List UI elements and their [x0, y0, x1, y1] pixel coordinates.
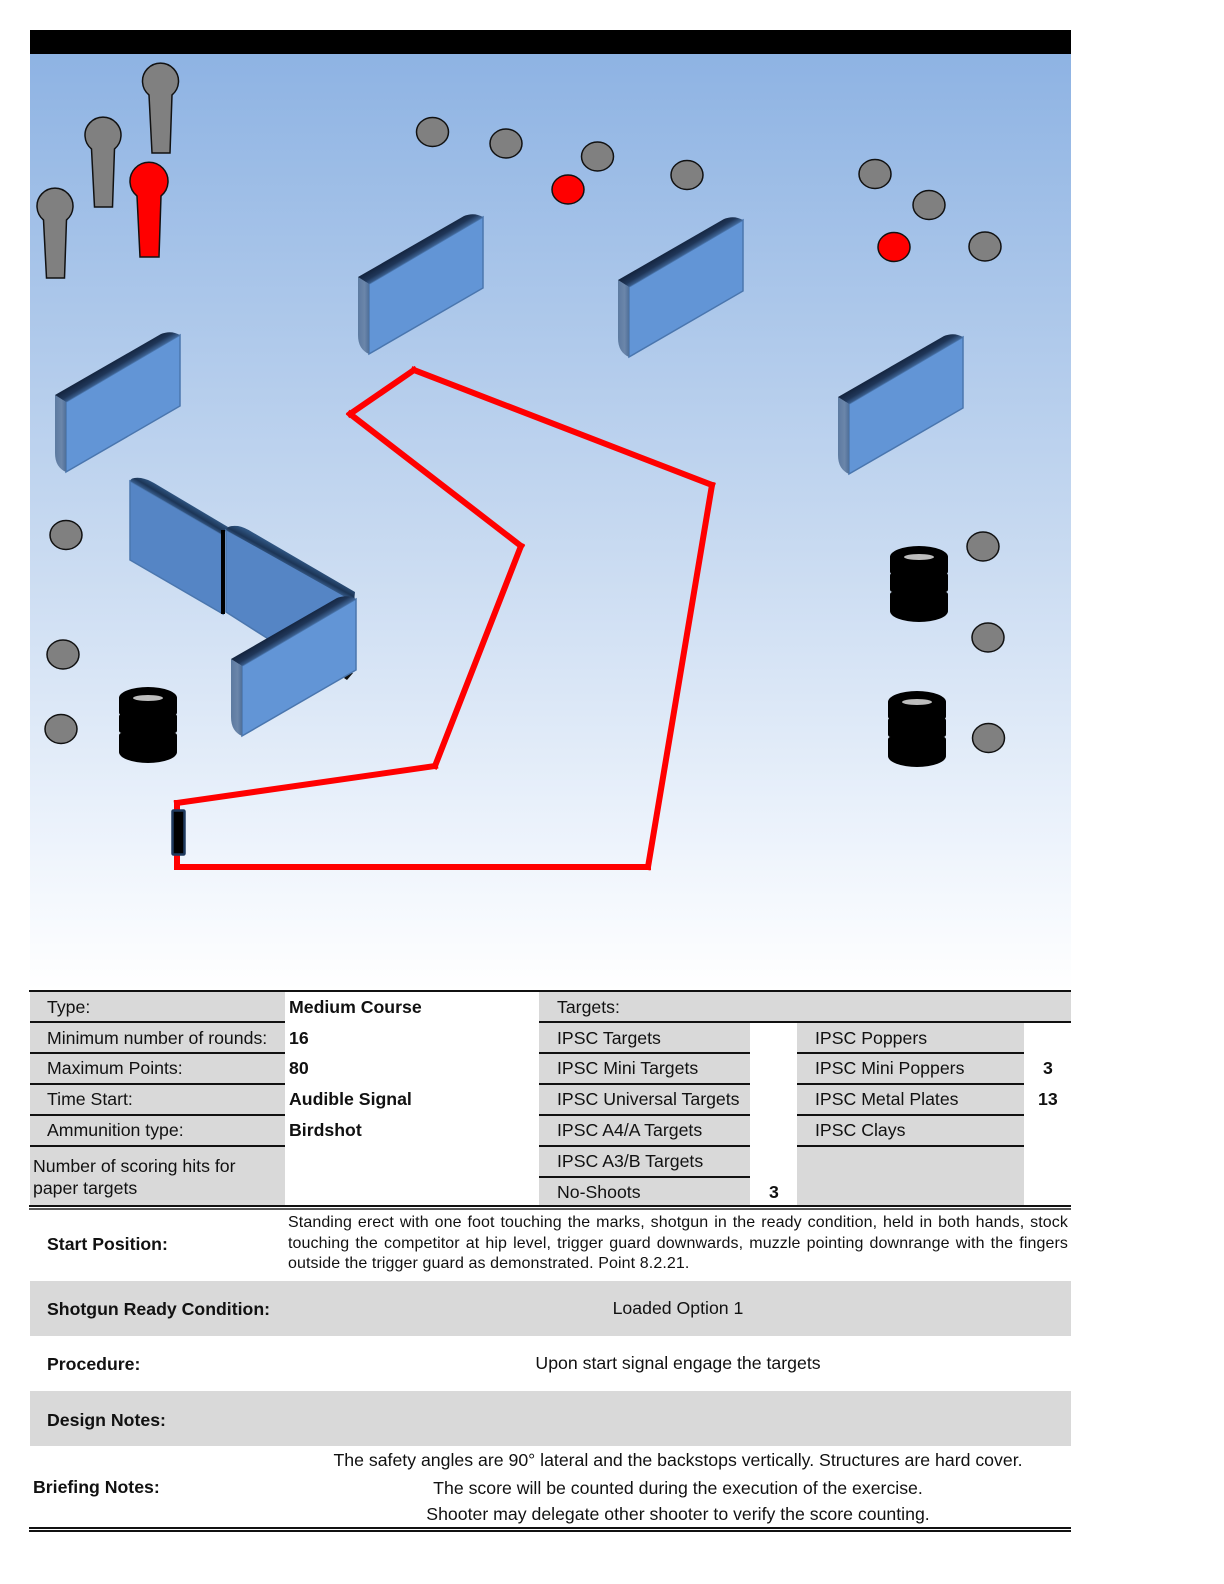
target: A4/A targets: IPSC A4/A Targets — [557, 1120, 702, 1140]
stage diagram — [30, 54, 1071, 924]
target: no-shoots: No-Shoots — [557, 1182, 641, 1202]
wall: back panel B — [226, 526, 355, 640]
label: start position: Start Position: — [47, 1234, 168, 1254]
panel: stage info table — [29, 990, 1071, 1210]
value: maximum points: 80 — [289, 1058, 309, 1078]
popper: red no-shoot — [130, 162, 168, 257]
target: clays: IPSC Clays — [815, 1120, 905, 1140]
value: time start: Audible Signal — [289, 1089, 412, 1109]
panel: design notes — [30, 1391, 1071, 1446]
label: minimum rounds: Minimum number of rounds: — [47, 1028, 267, 1048]
target: mini targets: IPSC Mini Targets — [557, 1058, 698, 1078]
metal plates: top centre group — [416, 118, 703, 204]
barrel: right lower — [888, 691, 946, 767]
value: procedure: Upon start signal engage the targets — [535, 1353, 821, 1373]
count: metal plates: 13 — [1038, 1089, 1058, 1109]
value: shotgun ready condition: Loaded Option 1 — [613, 1298, 743, 1318]
value: minimum rounds: 16 — [289, 1028, 309, 1048]
count: no-shoots: 3 — [769, 1182, 779, 1202]
note line 3: Shooter may delegate other shooter to verify the score counting. — [426, 1504, 930, 1524]
label: procedure: Procedure: — [47, 1354, 140, 1374]
popper: grey 2 — [85, 117, 121, 207]
text: start position line 1: Standing erect with one foot touching the marks, shotgun in the ready condition, held in both hands, stock — [288, 1214, 1068, 1231]
target: poppers: IPSC Poppers — [815, 1028, 927, 1048]
label: scoring hits: paper targets — [33, 1178, 137, 1198]
wall: front of L — [231, 596, 356, 736]
target: mini poppers: IPSC Mini Poppers — [815, 1058, 964, 1078]
target: universal targets: IPSC Universal Targets — [557, 1089, 740, 1109]
panel: briefing notes — [29, 1450, 1071, 1532]
wall: left — [55, 332, 180, 472]
label: time start: Time Start: — [47, 1089, 133, 1109]
note line 2: The score will be counted during the execution of the exercise. — [433, 1478, 923, 1498]
label: scoring hits — [33, 1156, 236, 1198]
label: shotgun ready condition: Shotgun Ready Condition: — [47, 1299, 270, 1319]
text: start position line 2: touching the competitor at hip level, trigger guard downwards, muzzle pointing downrange with the fingers — [288, 1235, 1068, 1252]
start position marker — [172, 810, 184, 854]
small dark mark behind front wall — [344, 672, 353, 680]
wall divider — [221, 530, 225, 614]
panel: procedure — [47, 1353, 821, 1374]
sky gradient background — [30, 54, 1071, 990]
wall: back panel A — [130, 478, 228, 614]
target: A3/B targets: IPSC A3/B Targets — [557, 1151, 703, 1171]
metal plates: right group — [967, 532, 1004, 752]
panel: shotgun ready condition — [30, 1281, 1071, 1336]
label: ammunition type: Ammunition type: — [47, 1120, 184, 1140]
value: ammunition type: Birdshot — [289, 1120, 362, 1140]
popper: grey 3 — [37, 188, 73, 278]
target: IPSC targets: IPSC Targets — [557, 1028, 661, 1048]
panel: start position — [47, 1214, 1068, 1272]
wall: far right — [838, 334, 963, 474]
note line 1: The safety angles are 90° lateral and the backstops vertically. Structures are hard cover. — [333, 1450, 1023, 1470]
label: scoring hits: Number of scoring hits for — [33, 1156, 236, 1176]
label: design notes: Design Notes: — [47, 1410, 166, 1430]
label: type: Type: — [47, 997, 90, 1017]
header bar — [30, 30, 1071, 54]
barrel: right upper — [890, 546, 948, 622]
target: metal plates: IPSC Metal Plates — [815, 1089, 959, 1109]
course path: red boundary — [177, 370, 712, 867]
metal plates: top right group — [859, 160, 1001, 262]
wall: top centre — [358, 214, 483, 354]
popper: grey 1 — [142, 63, 178, 153]
heading: targets: Targets: — [557, 997, 620, 1017]
barrel: left — [119, 687, 177, 763]
value: type: Medium Course — [289, 997, 422, 1017]
wall: top right — [618, 217, 743, 357]
count: mini poppers: 3 — [1043, 1058, 1053, 1078]
label: maximum points: Maximum Points: — [47, 1058, 183, 1078]
metal plates: left group — [45, 520, 82, 744]
text: start position line 3: outside the trigger guard as demonstrated. Point 8.2.21. — [288, 1255, 689, 1272]
label: briefing notes: Briefing Notes: — [33, 1477, 160, 1497]
